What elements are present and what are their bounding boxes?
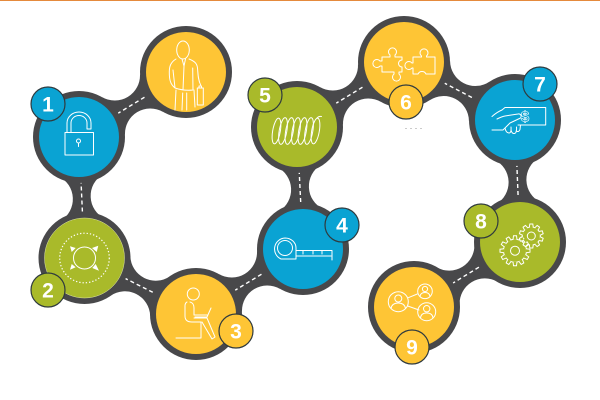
node: step 9 people network <box>368 261 460 364</box>
top orange rule <box>0 0 600 1</box>
node: step 4 tape measure <box>257 203 359 295</box>
badge: number 7: 7 <box>534 74 546 96</box>
badge: number 2: 2 <box>42 280 54 302</box>
icon: large gear <box>500 236 530 266</box>
badge: number 9: 9 <box>406 336 418 360</box>
node: step 8 gears <box>464 196 566 288</box>
icon: small gear <box>519 224 543 248</box>
icon: businessman <box>169 41 203 110</box>
icon: connected people <box>388 284 436 321</box>
icon: open padlock <box>65 112 94 155</box>
icon: coil spring <box>271 116 322 145</box>
connector: step 1 to step 2 <box>59 174 105 221</box>
faint marks below step 6 <box>405 128 424 130</box>
badge: number 5: 5 <box>259 84 271 108</box>
connector: step 4 to step 5 <box>277 165 323 211</box>
connector: step 8 to step 9 <box>437 244 497 305</box>
badge: number 4: 4 <box>336 214 348 238</box>
node: step 3 person at laptop <box>150 268 253 360</box>
node: step 6 puzzle <box>358 16 450 119</box>
connector: step 5 to step 6 <box>320 64 381 125</box>
icon: tape measure <box>275 238 332 260</box>
icon: circle with outward arrows <box>60 233 109 283</box>
badge: number 1: 1 <box>42 94 54 116</box>
icon: hand holding a banknote: $ <box>521 108 530 126</box>
badge: number 8: 8 <box>475 210 487 234</box>
connector: step 2 to step 3 <box>110 256 170 316</box>
icon: jigsaw pieces <box>373 48 435 81</box>
badge: number 6: 6 <box>400 92 412 114</box>
badge: number 3: 3 <box>230 320 242 344</box>
connector: step 1 to person <box>102 74 163 135</box>
node: step 7 hand with money <box>469 67 561 166</box>
icon: seated person with laptop <box>176 288 215 339</box>
node: person with briefcase <box>140 26 232 118</box>
connector: step 3 to step 4 <box>219 251 280 312</box>
connector: step 6 to step 7 <box>430 61 489 121</box>
node: step 2 expansion <box>31 212 130 307</box>
connector: step 7 to step 8 <box>495 158 540 204</box>
node: step 5 spring <box>248 78 343 173</box>
node: step 1 padlock <box>31 87 125 183</box>
